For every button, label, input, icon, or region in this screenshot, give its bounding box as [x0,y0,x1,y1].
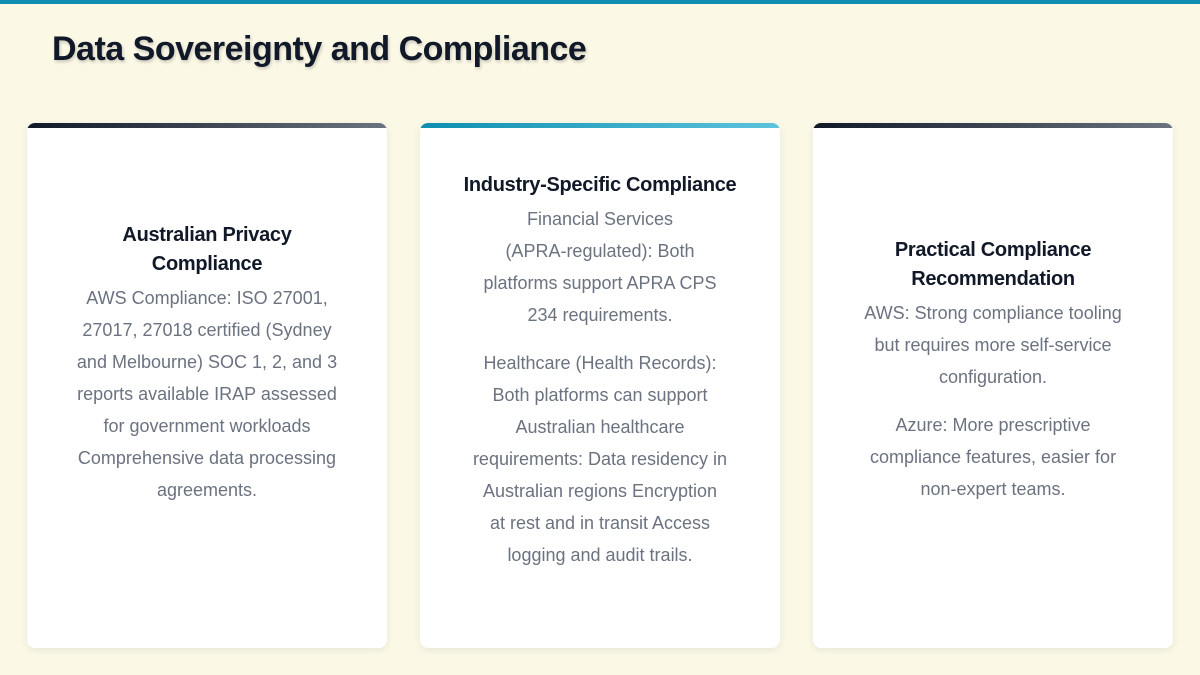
text: aws compliance: reports available IRAP assessed [77,384,337,404]
text: healthcare: Healthcare (Health Records): [483,352,717,372]
text: aws compliance: 27017, 27018 certified (Sydney [82,320,332,340]
text: azure: non-expert teams. [920,479,1066,499]
text: healthcare: at rest and in transit Access [490,512,710,532]
text: healthcare: Australian regions Encryption [483,480,717,500]
text: financial services: (APRA-regulated): Both [505,240,695,260]
heading: australian privacy: Compliance [152,253,262,275]
heading: practical recommendation: Practical Compliance [895,239,1091,261]
heading: practical recommendation: Recommendation [911,268,1075,290]
text: financial services: platforms support APRA CPS [483,272,717,292]
heading: industry-specific: Industry-Specific Compliance [464,174,736,196]
text: aws: AWS: Strong compliance tooling [864,303,1122,323]
text: aws compliance [77,288,337,500]
text: aws: configuration. [939,367,1047,387]
text: azure [870,415,1116,499]
text: azure: Azure: More prescriptive [895,415,1091,435]
text: aws compliance: and Melbourne) SOC 1, 2, and 3 [77,352,337,372]
text: aws compliance: Comprehensive data processing [78,448,336,468]
text: aws compliance: AWS Compliance: ISO 27001, [86,288,328,308]
text: aws [864,303,1122,387]
text: azure: compliance features, easier for [870,447,1116,467]
text: healthcare: requirements: Data residency in [473,448,727,468]
text: healthcare: Both platforms can support [492,384,708,404]
panel: practical recommendation [813,123,1173,648]
heading: practical recommendation [895,239,1091,290]
heading: australian privacy: Australian Privacy [122,224,292,246]
text: healthcare: logging and audit trails. [507,544,693,564]
text: aws compliance: for government workloads [103,416,311,436]
text: healthcare [473,352,727,565]
text: aws compliance: agreements. [157,480,257,500]
text: healthcare: Australian healthcare [515,416,685,436]
heading: australian privacy [122,224,292,275]
text: financial services: 234 requirements. [527,304,673,324]
panel: industry-specific [420,123,780,648]
text: financial services: Financial Services [527,208,673,228]
text: financial services [483,208,717,325]
panel: australian privacy [27,123,387,648]
title: Data Sovereignty and Compliance [52,30,586,68]
text: aws: but requires more self-service [874,335,1112,355]
